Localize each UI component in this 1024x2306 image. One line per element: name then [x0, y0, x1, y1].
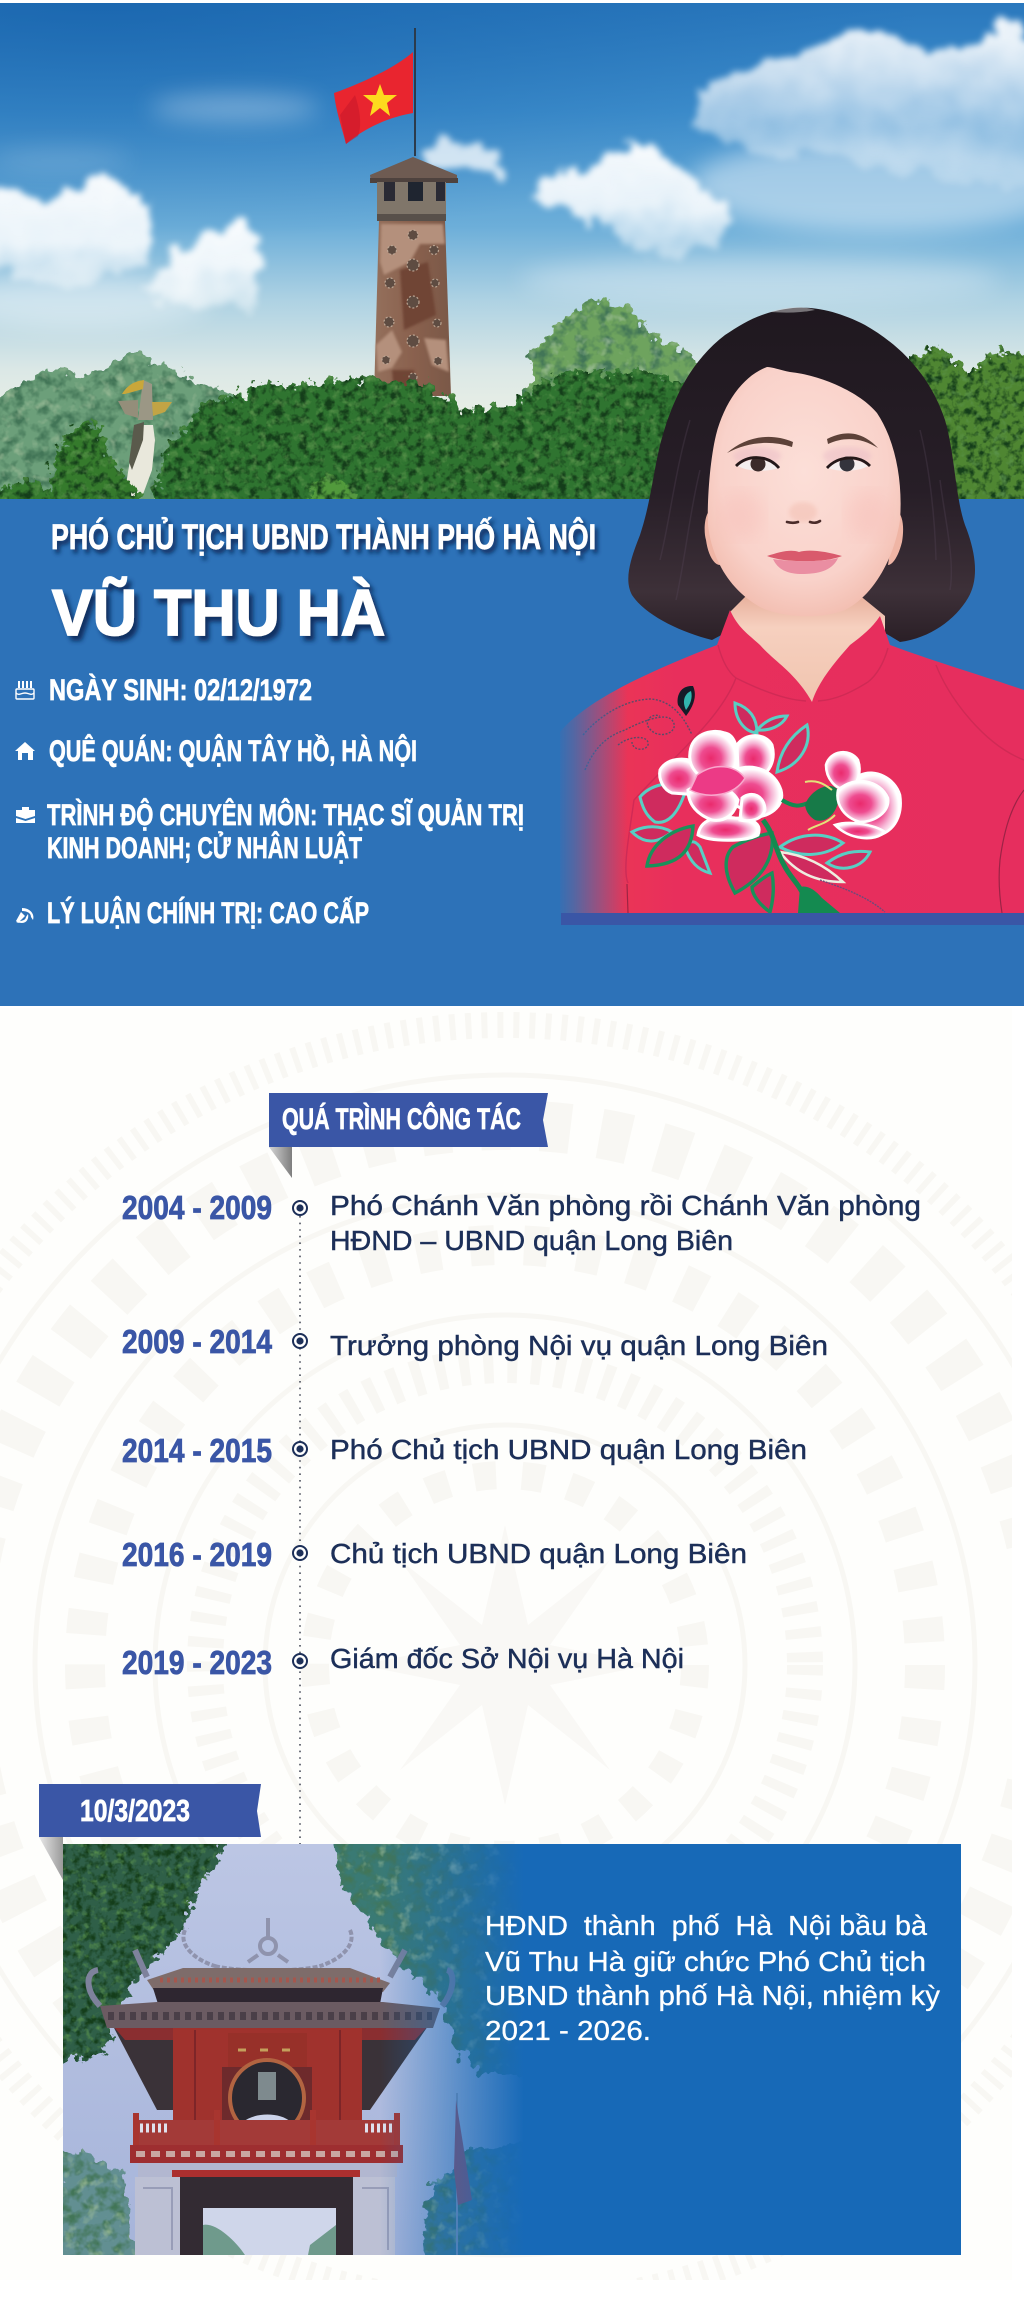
info: education: KINH DOANH; CỬ NHÂN LUẬT [47, 831, 362, 865]
face [705, 367, 903, 616]
photo: Temple of Literature pavilion [55, 1835, 530, 2262]
crashed plane monument [118, 380, 172, 497]
background hazy trees [0, 298, 715, 500]
timeline: 2014 - 2015: 2014 - 2015 [122, 1432, 272, 1469]
flag [334, 52, 413, 144]
lower eaves [113, 2026, 428, 2110]
timeline: 2014 - 2015: Phó Chủ tịch UBND quận Long Biên [330, 1434, 807, 1465]
eyebrows [727, 433, 878, 453]
trees [55, 1835, 530, 2262]
date ribbon [39, 1784, 261, 1837]
embroidery: leaves and threads [583, 686, 885, 913]
photo fade to blue [380, 1844, 524, 2255]
info: hometown: QUÊ QUÁN: QUẬN TÂY HỒ, HÀ NỘI [49, 734, 417, 768]
left fade of dress [556, 690, 628, 914]
info: education [16, 798, 524, 865]
timeline: 2019 - 2023: Giám đốc Sở Nội vụ Hà Nội [330, 1643, 684, 1674]
timeline: 2004 - 2009 [122, 1189, 921, 1256]
ornament band [130, 2145, 403, 2163]
profile panel [0, 499, 1024, 1006]
date ribbon fold [39, 1837, 63, 1880]
section heading ribbon: work history: QUÁ TRÌNH CÔNG TÁC [282, 1102, 521, 1136]
embroidery: peony flower large [660, 731, 782, 840]
timeline: 2009 - 2014 [122, 1323, 828, 1361]
round window [222, 2058, 312, 2120]
timeline: 2009 - 2014: Trưởng phòng Nội vụ quận Long Biên [330, 1330, 828, 1361]
icon: house [15, 742, 35, 760]
title: position: PHÓ CHỦ TỊCH UBND THÀNH PHỐ HÀ NỘI [51, 517, 596, 557]
icon: cake [16, 681, 34, 699]
icon: briefcase [16, 807, 35, 823]
note text: HĐND thành phố Hà Nội bầu bà [485, 1910, 927, 1941]
note text: Vũ Thu Hà giữ chức Phó Chủ tịch [485, 1946, 926, 1977]
main tree mass [0, 345, 1024, 510]
signboard [228, 2033, 307, 2067]
roof ornaments [88, 1918, 452, 2006]
clouds [0, 22, 1024, 328]
balcony railing [133, 2110, 400, 2145]
date ribbon: 10/3/2023 [80, 1793, 190, 1828]
timeline dotted line [299, 1216, 301, 1844]
eyes [738, 459, 868, 471]
note text: 2021 - 2026. [485, 2015, 651, 2046]
dress [560, 610, 1024, 913]
portrait base bar [561, 913, 1024, 925]
timeline: 2016 - 2019: 2016 - 2019 [122, 1536, 272, 1573]
timeline: 2014 - 2015 [122, 1432, 807, 1469]
marker [293, 1654, 307, 1668]
lips [767, 551, 842, 561]
panel background [63, 1844, 961, 2255]
section heading ribbon: work history [269, 1093, 548, 1178]
marker [293, 1334, 307, 1348]
ribbon fold [269, 1147, 292, 1178]
hair [628, 307, 975, 642]
info: hometown [15, 734, 417, 768]
marker [293, 1201, 307, 1215]
marker [293, 1442, 307, 1456]
lower roof [100, 2002, 440, 2028]
panel: election note [55, 1835, 961, 2262]
timeline: 2016 - 2019 [122, 1536, 747, 1573]
marker [293, 1546, 307, 1560]
flag pole and banner [454, 2093, 472, 2255]
timeline: 2019 - 2023: 2019 - 2023 [122, 1644, 272, 1681]
timeline: 2004 - 2009: HĐND – UBND quận Long Biên [330, 1225, 733, 1256]
tower shaft [374, 221, 451, 396]
icon: hammer and sickle [16, 908, 33, 923]
faint bronze drum background pattern [0, 1008, 1024, 2305]
sky [0, 3, 1024, 499]
flag pole [414, 28, 416, 156]
timeline: 2019 - 2023 [122, 1643, 684, 1681]
neck [730, 592, 885, 710]
embroidery: peony flower small [782, 752, 901, 838]
timeline: 2009 - 2014: 2009 - 2014 [122, 1323, 273, 1360]
timeline: 2004 - 2009: Phó Chánh Văn phòng rồi Chánh Văn phòng [330, 1190, 921, 1221]
note text [485, 1910, 940, 2046]
info: date of birth [16, 673, 312, 707]
lintel and gate [135, 2163, 397, 2255]
info: political theory [16, 896, 369, 930]
red body [173, 2028, 362, 2130]
timeline: 2016 - 2019: Chủ tịch UBND quận Long Biên [330, 1538, 747, 1569]
info: education: TRÌNH ĐỘ CHUYÊN MÔN: THẠC SĨ QUẢN TRỊ [47, 798, 524, 832]
nose [789, 502, 817, 522]
title: name: VŨ THU HÀ [52, 576, 385, 649]
info: political theory: LÝ LUẬN CHÍNH TRỊ: CAO CẤP [47, 896, 369, 930]
info: date of birth: NGÀY SINH: 02/12/1972 [49, 673, 312, 707]
tower roof [370, 157, 457, 178]
note text: UBND thành phố Hà Nội, nhiệm kỳ [485, 1980, 940, 2011]
timeline: 2004 - 2009: 2004 - 2009 [122, 1189, 272, 1226]
flag tower [334, 28, 458, 396]
upper roof [147, 1968, 390, 2004]
hero photo: Hanoi flag tower, sky and trees [0, 3, 1024, 510]
portrait [556, 307, 1024, 914]
top chamber [377, 182, 446, 214]
